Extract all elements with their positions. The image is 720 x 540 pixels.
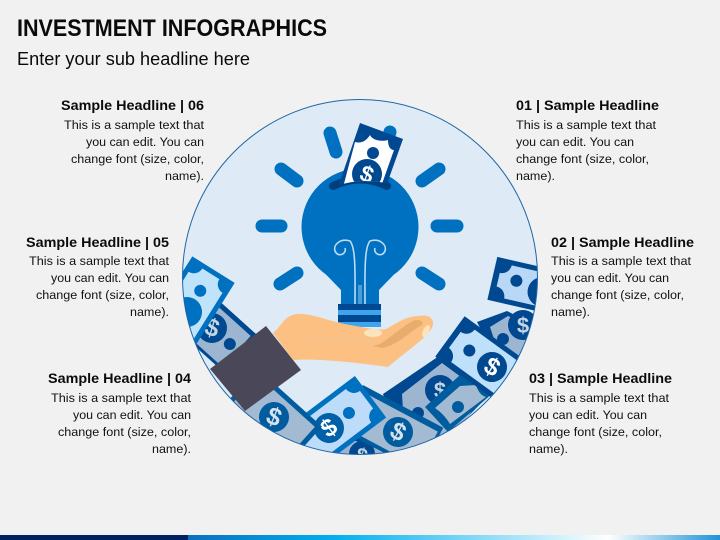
- bill: lower left grey: $: [262, 401, 286, 433]
- text block 04: name).: [152, 442, 191, 456]
- bill: right grey: [477, 310, 533, 356]
- text block 01: name).: [516, 169, 555, 183]
- text block 03: 03 | Sample Headline: [529, 370, 672, 386]
- bill: upper right: [487, 256, 537, 310]
- text block 02: name).: [551, 305, 590, 319]
- bill: right grey: $: [517, 313, 529, 338]
- text block 06: change font (size, color,: [71, 152, 204, 166]
- text block 06: you can edit. You can: [86, 135, 204, 149]
- text block 03: This is a sample text that: [529, 391, 670, 405]
- text block 05: Sample Headline | 05: [26, 234, 169, 250]
- bill: bottom grey: $: [385, 416, 411, 448]
- text block 03: [529, 370, 672, 456]
- rays around bulb: [262, 132, 457, 284]
- text block 04: change font (size, color,: [58, 425, 191, 439]
- icon: light bulb: [302, 168, 418, 327]
- circle outline: [182, 100, 538, 454]
- text block 02: change font (size, color,: [551, 288, 684, 302]
- text block 01: change font (size, color,: [516, 152, 649, 166]
- text block 04: This is a sample text that: [51, 391, 192, 405]
- bill: bright right: $: [479, 351, 505, 383]
- text block 01: This is a sample text that: [516, 118, 657, 132]
- bill: bottom small: $: [352, 444, 370, 468]
- text block 05: you can edit. You can: [51, 271, 169, 285]
- text block 06: Sample Headline | 06: [61, 97, 204, 113]
- text block 02: This is a sample text that: [551, 254, 692, 268]
- icon: banknote entering bulb: [338, 123, 403, 186]
- title: INVESTMENT INFOGRAPHICS: [17, 15, 327, 42]
- icon: banknote entering bulb: $: [357, 160, 378, 188]
- text block 06: [61, 97, 205, 183]
- text block 02: 02 | Sample Headline: [551, 234, 694, 250]
- bill: dark grey behind: $: [434, 378, 446, 403]
- bill: bright right: [435, 316, 518, 397]
- text block 05: [26, 234, 170, 319]
- bill: bottom bright: $: [315, 413, 343, 443]
- text block 04: [48, 370, 192, 456]
- text block 06: This is a sample text that: [64, 118, 205, 132]
- text block 05: change font (size, color,: [36, 288, 169, 302]
- hand: [273, 314, 433, 367]
- circle background: [182, 100, 538, 454]
- text block 01: you can edit. You can: [516, 135, 634, 149]
- text block 03: you can edit. You can: [529, 408, 647, 422]
- text block 05: name).: [130, 305, 169, 319]
- text block 03: name).: [529, 442, 568, 456]
- bill: left grey: [196, 303, 256, 365]
- bill: left top bright: [183, 256, 235, 344]
- bill: lower left grey: [230, 386, 322, 446]
- subtitle: Enter your sub headline here: [17, 49, 250, 69]
- bill: front right: [425, 375, 493, 432]
- text block 04: Sample Headline | 04: [48, 370, 191, 386]
- text block 04: you can edit. You can: [73, 408, 191, 422]
- text block 06: name).: [165, 169, 204, 183]
- central illustration: [262, 123, 457, 327]
- text block 01: [516, 97, 659, 183]
- text block 03: change font (size, color,: [529, 425, 662, 439]
- text block 02: you can edit. You can: [551, 271, 669, 285]
- bill: left grey: $: [201, 313, 223, 343]
- bill: bottom grey: [358, 385, 444, 452]
- money pile: [183, 256, 537, 454]
- text block 05: This is a sample text that: [29, 254, 170, 268]
- text block 01: 01 | Sample Headline: [516, 97, 659, 113]
- bill: bottom small: [339, 438, 383, 454]
- bill: dark grey behind: [383, 358, 482, 436]
- sleeve: [210, 326, 301, 411]
- footer bar: [0, 535, 720, 540]
- text block 02: [551, 234, 694, 319]
- bill: bottom bright: [305, 376, 386, 453]
